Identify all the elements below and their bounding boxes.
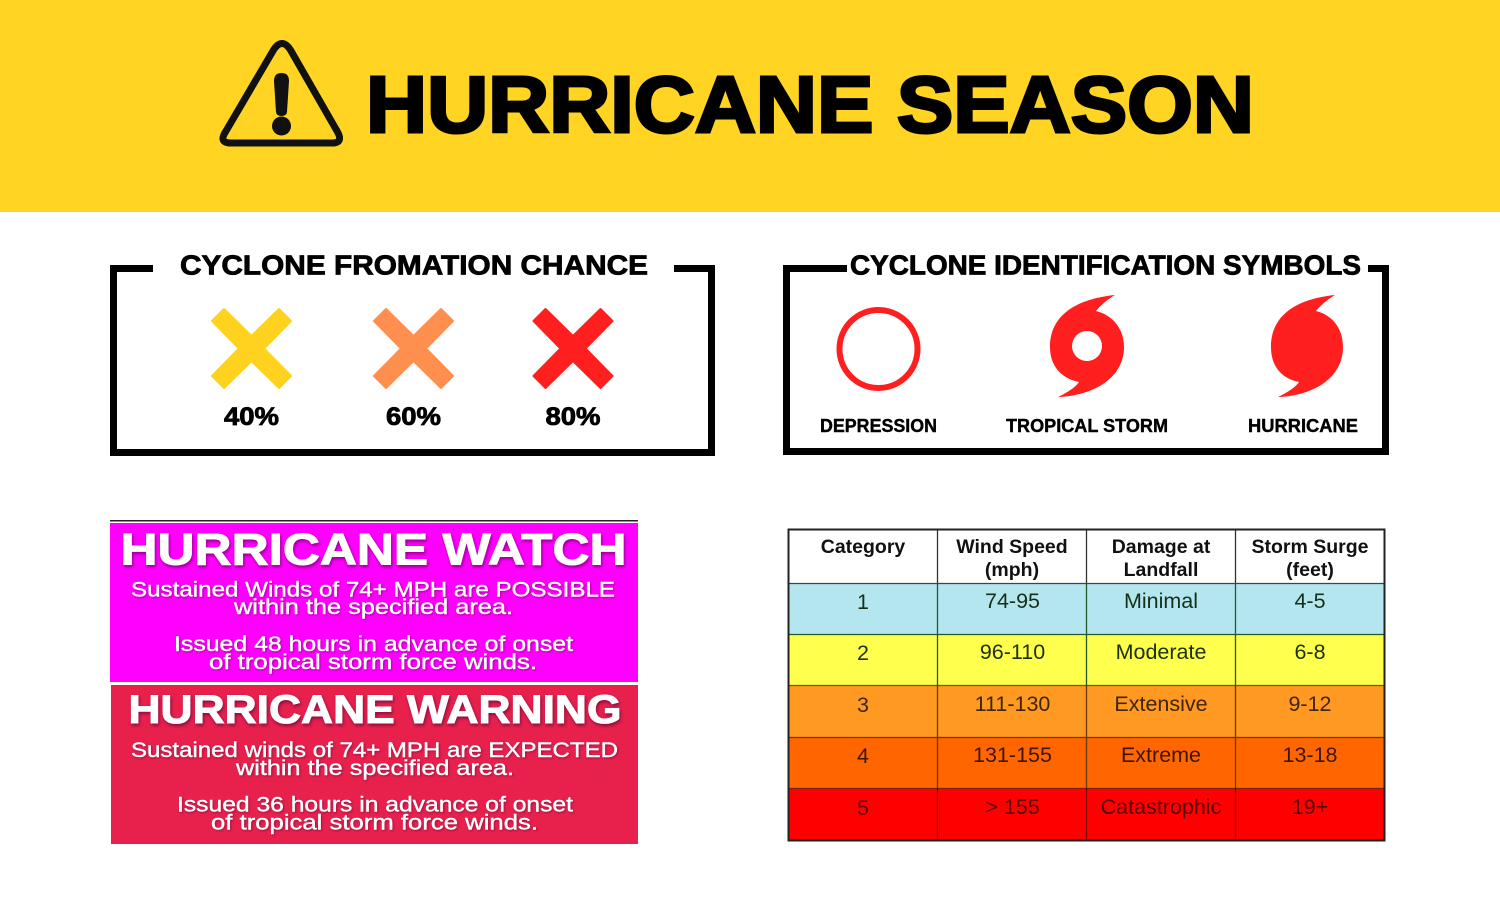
icon: orange X 60%: 60%: [386, 403, 441, 431]
table row: category 1: Minimal: [1124, 589, 1198, 613]
table row: category 1: 1: [857, 590, 869, 614]
table row: category 3: [857, 692, 1332, 717]
table row: category 1: 74-95: [985, 589, 1040, 613]
table header row: Wind Speed: [956, 536, 1068, 558]
table row: category 2: [857, 640, 1326, 665]
heading: hurricane watch: HURRICANE WATCH: [120, 526, 626, 574]
icon: red X 80%: [534, 309, 612, 431]
title: HURRICANE SEASON: [366, 60, 1254, 149]
table row: category 2: 2: [857, 641, 869, 665]
table row: category 5: [857, 795, 1328, 820]
icon: red X 80%: 80%: [546, 403, 600, 431]
text: warning description: of tropical storm force winds.: [211, 810, 538, 834]
text: watch description: Issued 48 hours in advance of onset: [174, 632, 573, 656]
icon: hurricane symbol: [1248, 295, 1358, 436]
table row: category 3: 111-130: [975, 692, 1050, 716]
table row: category 5: 5: [857, 796, 869, 820]
text: warning description: [131, 738, 618, 834]
table row: category 4: 4: [857, 744, 869, 768]
table row: category 4: 131-155: [973, 743, 1052, 767]
table row: category 2: 6-8: [1294, 640, 1326, 664]
table row: category 5: Catastrophic: [1101, 795, 1222, 819]
panel: hurricane warning: [111, 685, 638, 844]
table row: category 4: [857, 743, 1338, 768]
table header row: Damage at: [1112, 536, 1211, 558]
table row: category 3: 9-12: [1288, 692, 1332, 716]
panel: cyclone identification symbols: [786, 250, 1386, 452]
icon: yellow X 40%: 40%: [224, 403, 279, 431]
icon: depression circle: [820, 310, 937, 436]
text: watch description: Sustained Winds of 74+ MPH are POSSIBLE: [131, 578, 615, 602]
table row: category 1: [857, 589, 1326, 614]
text: watch description: [131, 578, 615, 674]
table row: category 2: 96-110: [980, 640, 1045, 664]
text: warning description: within the specified area.: [235, 756, 514, 780]
table header row: (mph): [985, 559, 1039, 581]
table row: category 4: 13-18: [1282, 743, 1338, 767]
panel: hurricane watch: [110, 520, 638, 682]
table row: category 5: > 155: [985, 795, 1040, 819]
icon: depression circle: DEPRESSION: [820, 416, 937, 436]
icon: hurricane symbol: HURRICANE: [1248, 416, 1358, 436]
heading: formation chance: CYCLONE FROMATION CHANCE: [180, 250, 648, 280]
text: warning description: Issued 36 hours in advance of onset: [177, 792, 573, 816]
table row: category 3: 3: [857, 693, 869, 717]
icon: tropical storm symbol: TROPICAL STORM: [1006, 416, 1168, 436]
icon: orange X 60%: [374, 309, 453, 431]
table row: category 1: 4-5: [1294, 589, 1326, 613]
heading: hurricane warning: HURRICANE WARNING: [128, 688, 622, 732]
table row: category 2: Moderate: [1116, 640, 1206, 664]
icon: warning triangle: [223, 44, 340, 143]
header banner: [0, 0, 1500, 212]
icon: yellow X 40%: [212, 309, 291, 431]
table row: category 3: Extensive: [1114, 692, 1208, 716]
text: watch description: of tropical storm force winds.: [209, 650, 537, 674]
table header row: Landfall: [1124, 559, 1198, 581]
table: saffir-simpson categories: [788, 529, 1385, 841]
table row: category 5: 19+: [1292, 795, 1328, 819]
table header row: Storm Surge: [1251, 536, 1369, 558]
text: warning description: Sustained winds of 74+ MPH are EXPECTED: [131, 738, 618, 762]
icon: tropical storm symbol: [1006, 295, 1168, 436]
text: watch description: within the specified area.: [233, 595, 513, 619]
panel: cyclone formation chance: [114, 250, 712, 452]
table row: category 4: Extreme: [1121, 743, 1201, 767]
table header row: (feet): [1286, 559, 1334, 581]
heading: identification symbols: CYCLONE IDENTIFICATION SYMBOLS: [850, 250, 1361, 280]
table header row: [821, 536, 1369, 581]
table header row: Category: [821, 536, 905, 558]
